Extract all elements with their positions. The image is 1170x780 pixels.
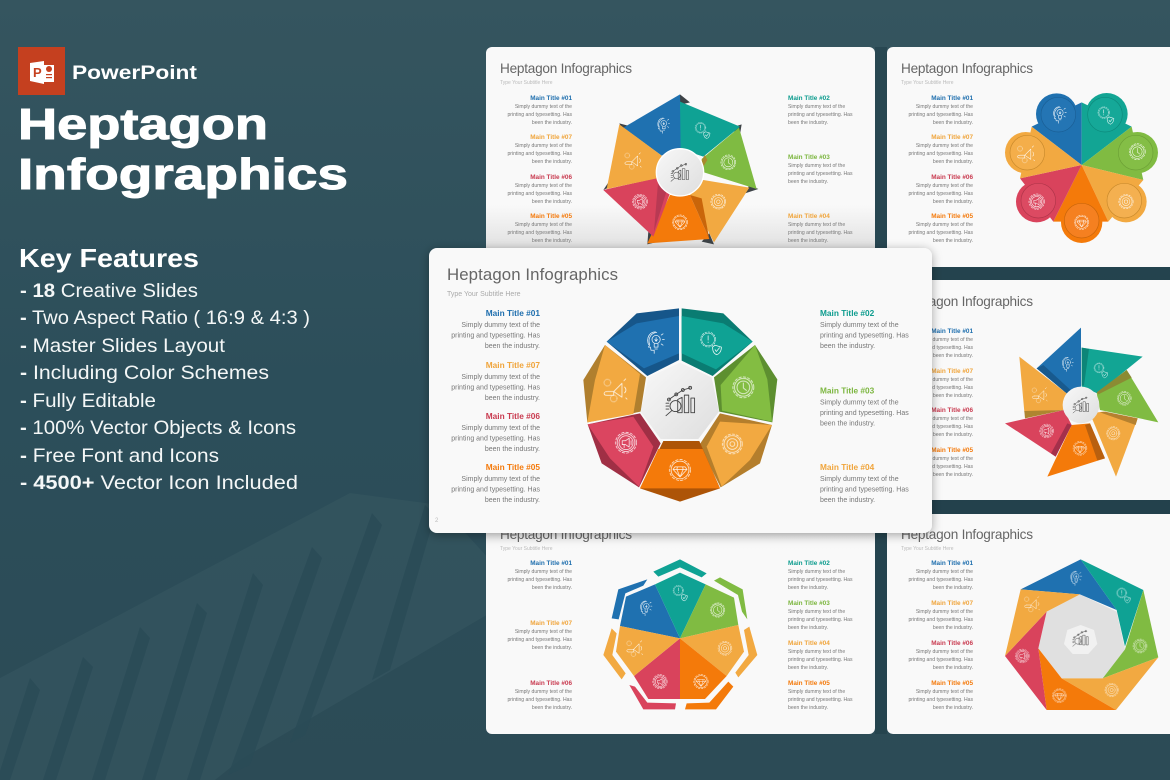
chart: bevelled heptagon <box>583 308 777 502</box>
left text column: been the industry. <box>933 705 973 711</box>
feature rows: - 18 Creative Slides <box>20 280 198 302</box>
left text column: Main Title #07 <box>530 134 572 141</box>
right text column: been the industry. <box>820 343 875 350</box>
right text column <box>788 560 853 711</box>
slide title: Heptagon Infographics <box>901 294 1033 309</box>
feature rows: - Free Font and Icons <box>20 445 219 467</box>
left text column: Main Title #01 <box>530 95 572 102</box>
left text column: printing and typesetting. Has <box>451 384 540 392</box>
left text column: been the industry. <box>485 446 540 453</box>
left text column: Simply dummy text of the <box>916 649 973 655</box>
left text column: Simply dummy text of the <box>515 183 572 189</box>
left text column: been the industry. <box>532 199 572 205</box>
chart: folded heptagon <box>603 94 758 244</box>
left text column <box>507 560 572 711</box>
left text column: been the industry. <box>532 705 572 711</box>
left text column: Simply dummy text of the <box>461 425 540 432</box>
right text column: Main Title #03 <box>820 386 875 396</box>
panel: slide top right, petal heptagon <box>887 47 1170 267</box>
left text column: Main Title #05 <box>931 213 973 220</box>
icon: hub chart <box>666 386 695 416</box>
feature rows: - Two Aspect Ratio ( 16:9 & 4:3 ) <box>20 307 310 329</box>
slide subtitle: Type Your Subtitle Here <box>447 291 521 298</box>
panel: slide bottom left, ringed heptagon <box>486 514 875 734</box>
title: Infographics: Infographics <box>18 150 348 199</box>
segment: teal <box>682 308 753 376</box>
left text column: Simply dummy text of the <box>916 456 973 462</box>
right text column: Main Title #02 <box>788 560 830 567</box>
icons <box>1032 357 1131 455</box>
right text column: printing and typesetting. Has <box>788 112 853 118</box>
panel: key features list <box>19 243 310 494</box>
left text column: been the industry. <box>933 238 973 244</box>
left text column: Simply dummy text of the <box>515 222 572 228</box>
left text column: been the industry. <box>933 625 973 631</box>
left text column: printing and typesetting. Has <box>908 464 973 470</box>
left text column: printing and typesetting. Has <box>507 637 572 643</box>
left text column: printing and typesetting. Has <box>908 617 973 623</box>
left text column: printing and typesetting. Has <box>507 697 572 703</box>
slide title: Heptagon Infographics <box>500 527 632 542</box>
left text column: been the industry. <box>933 585 973 591</box>
left text column: Simply dummy text of the <box>916 183 973 189</box>
left text column: printing and typesetting. Has <box>908 112 973 118</box>
left text column: printing and typesetting. Has <box>908 697 973 703</box>
left text column: Main Title #06 <box>486 411 540 421</box>
panel: PowerPoint logo and title block <box>18 47 348 199</box>
chart: petal heptagon <box>1005 93 1158 243</box>
left text column: Simply dummy text of the <box>461 476 540 483</box>
chart: pinwheel heptagon <box>1005 328 1158 477</box>
right text column: Simply dummy text of the <box>788 163 845 169</box>
right text column: Simply dummy text of the <box>788 104 845 110</box>
left text column: been the industry. <box>532 120 572 126</box>
right text column: Simply dummy text of the <box>788 689 845 695</box>
left text column: Main Title #01 <box>486 308 540 318</box>
left text column: printing and typesetting. Has <box>908 424 973 430</box>
left text column: Simply dummy text of the <box>916 609 973 615</box>
left text column: Main Title #01 <box>530 560 572 567</box>
left text column: Main Title #07 <box>931 134 973 141</box>
left text column: Simply dummy text of the <box>916 337 973 343</box>
right text column: been the industry. <box>788 238 828 244</box>
icon: hub chart <box>1073 630 1088 646</box>
left text column: printing and typesetting. Has <box>908 345 973 351</box>
slide title: Heptagon Infographics <box>901 61 1033 76</box>
feature rows: - 100% Vector Objects & Icons <box>20 417 296 439</box>
slide title: Heptagon Infographics <box>500 61 632 76</box>
slide subtitle: Type Your Subtitle Here <box>901 546 954 552</box>
right text column: Simply dummy text of the <box>788 569 845 575</box>
segment: orange <box>640 441 720 502</box>
left text column: been the industry. <box>532 238 572 244</box>
left text column: been the industry. <box>933 353 973 359</box>
right text column: been the industry. <box>820 497 875 504</box>
left text column <box>908 328 973 478</box>
left text column: been the industry. <box>933 665 973 671</box>
right text column <box>820 308 909 504</box>
left text column: printing and typesetting. Has <box>908 657 973 663</box>
page number: 2 <box>435 518 439 524</box>
left text column <box>451 308 540 504</box>
left text column: printing and typesetting. Has <box>908 577 973 583</box>
right text column: printing and typesetting. Has <box>788 577 853 583</box>
left text column: printing and typesetting. Has <box>507 151 572 157</box>
left text column: printing and typesetting. Has <box>507 230 572 236</box>
left text column: been the industry. <box>532 645 572 651</box>
left text column: printing and typesetting. Has <box>507 112 572 118</box>
segment: blue <box>607 308 679 376</box>
right text column: Simply dummy text of the <box>788 609 845 615</box>
left text column: printing and typesetting. Has <box>451 486 540 494</box>
left text column: Main Title #07 <box>530 620 572 627</box>
left text column <box>908 560 973 711</box>
left text column: Simply dummy text of the <box>515 569 572 575</box>
chart: ringed heptagon <box>603 559 757 709</box>
left text column: Main Title #01 <box>931 560 973 567</box>
slide title: Heptagon Infographics <box>901 527 1033 542</box>
right text column: Simply dummy text of the <box>820 322 899 329</box>
segment: yellow right <box>699 413 772 487</box>
right text column: printing and typesetting. Has <box>788 617 853 623</box>
left text column: been the industry. <box>485 395 540 402</box>
left text column: Simply dummy text of the <box>515 689 572 695</box>
right text column: Main Title #04 <box>820 462 875 472</box>
right text column: Main Title #03 <box>788 600 830 607</box>
left text column: Simply dummy text of the <box>515 143 572 149</box>
slide subtitle: Type Your Subtitle Here <box>500 546 553 552</box>
left text column: been the industry. <box>933 159 973 165</box>
segment: red <box>588 413 661 487</box>
right text column: Main Title #05 <box>788 680 830 687</box>
left text column: printing and typesetting. Has <box>908 191 973 197</box>
right text column: Main Title #02 <box>788 95 830 102</box>
left text column: Simply dummy text of the <box>515 104 572 110</box>
right text column: Simply dummy text of the <box>820 400 899 406</box>
slide subtitle: Type Your Subtitle Here <box>901 80 954 86</box>
left text column: Main Title #01 <box>931 328 973 335</box>
left text column: been the industry. <box>485 497 540 504</box>
heading: Key Features: Key Features <box>19 243 199 273</box>
icons <box>604 332 754 480</box>
left text column: Simply dummy text of the <box>916 143 973 149</box>
icon: PowerPoint logo: P <box>33 65 42 80</box>
left text column: Main Title #06 <box>931 174 973 181</box>
left text column: Simply dummy text of the <box>916 689 973 695</box>
slide title: Heptagon Infographics <box>447 265 618 284</box>
left text column: been the industry. <box>532 159 572 165</box>
left text column <box>908 95 973 244</box>
right text column <box>788 95 853 244</box>
left text column: printing and typesetting. Has <box>451 332 540 340</box>
icon: hub chart <box>1073 397 1089 413</box>
left text column: Simply dummy text of the <box>916 416 973 422</box>
left text column: printing and typesetting. Has <box>451 436 540 442</box>
panel: centre featured slide <box>429 248 932 533</box>
feature rows: - Master Slides Layout <box>20 335 226 357</box>
panel: slide top left, folded heptagon <box>486 47 875 267</box>
right text column: been the industry. <box>788 705 828 711</box>
right text column: been the industry. <box>788 179 828 185</box>
left text column: been the industry. <box>933 472 973 478</box>
left text column: Simply dummy text of the <box>916 104 973 110</box>
left text column: printing and typesetting. Has <box>908 230 973 236</box>
right text column: printing and typesetting. Has <box>788 230 853 236</box>
icons <box>625 118 736 230</box>
left text column: printing and typesetting. Has <box>507 191 572 197</box>
left text column: Main Title #05 <box>931 447 973 454</box>
left text column: Simply dummy text of the <box>916 377 973 383</box>
segment: yellow left <box>583 345 646 422</box>
right text column: printing and typesetting. Has <box>820 410 909 417</box>
left text column: Main Title #06 <box>530 174 572 181</box>
left text column: been the industry. <box>933 199 973 205</box>
left text column: Main Title #07 <box>931 368 973 375</box>
label: PowerPoint: PowerPoint <box>72 63 198 84</box>
left text column: printing and typesetting. Has <box>908 151 973 157</box>
right text column: Simply dummy text of the <box>820 476 899 483</box>
left text column: Main Title #06 <box>530 680 572 687</box>
left text column: Main Title #05 <box>486 462 540 472</box>
icon: hub chart <box>671 163 689 181</box>
right text column: Main Title #04 <box>788 640 830 647</box>
left text column: Simply dummy text of the <box>515 629 572 635</box>
right text column: been the industry. <box>788 665 828 671</box>
left text column <box>507 95 572 244</box>
right text column: printing and typesetting. Has <box>788 657 853 663</box>
panel: slide bottom right, spiral heptagon <box>887 514 1170 734</box>
left text column: been the industry. <box>933 120 973 126</box>
panel: slide middle right, pinwheel heptagon <box>887 280 1170 500</box>
title: Heptagon: Heptagon <box>18 100 268 149</box>
right text column: been the industry. <box>788 585 828 591</box>
left text column: been the industry. <box>933 393 973 399</box>
left text column: Main Title #07 <box>486 360 540 370</box>
left text column: been the industry. <box>532 585 572 591</box>
left text column: Main Title #05 <box>931 680 973 687</box>
right text column: Main Title #02 <box>820 308 875 318</box>
left text column: been the industry. <box>933 432 973 438</box>
right text column: Main Title #04 <box>788 213 830 220</box>
right text column: been the industry. <box>788 120 828 126</box>
segment: green <box>714 345 777 422</box>
left text column: been the industry. <box>485 343 540 350</box>
right text column: printing and typesetting. Has <box>788 697 853 703</box>
right text column: been the industry. <box>788 625 828 631</box>
right text column: Simply dummy text of the <box>788 649 845 655</box>
slide subtitle: Type Your Subtitle Here <box>500 80 553 86</box>
feature rows: - 4500+ Vector Icon Included <box>20 472 298 494</box>
right text column: been the industry. <box>820 420 875 428</box>
icon: PowerPoint logo <box>18 47 65 95</box>
left text column: Simply dummy text of the <box>916 569 973 575</box>
chart: spiral heptagon <box>1005 559 1158 710</box>
left text column: Main Title #01 <box>931 95 973 102</box>
right text column: printing and typesetting. Has <box>788 171 853 177</box>
feature rows: - Fully Editable <box>20 390 156 412</box>
right text column: Main Title #03 <box>788 154 830 161</box>
left text column: Main Title #06 <box>931 640 973 647</box>
left text column: Simply dummy text of the <box>461 374 540 381</box>
icons <box>1017 107 1145 229</box>
left text column: Simply dummy text of the <box>916 222 973 228</box>
left text column: Main Title #06 <box>931 407 973 414</box>
icons <box>627 585 732 689</box>
left text column: printing and typesetting. Has <box>507 577 572 583</box>
left text column: Main Title #05 <box>530 213 572 220</box>
right text column: Simply dummy text of the <box>788 222 845 228</box>
left text column: printing and typesetting. Has <box>908 385 973 391</box>
left text column: Main Title #07 <box>931 600 973 607</box>
right text column: printing and typesetting. Has <box>820 332 909 340</box>
hub heptagon <box>641 363 719 439</box>
feature rows: - Including Color Schemes <box>20 362 269 384</box>
feature rows <box>20 280 310 494</box>
left text column: Simply dummy text of the <box>461 322 540 329</box>
icons <box>1015 571 1147 703</box>
right text column: printing and typesetting. Has <box>820 486 909 494</box>
